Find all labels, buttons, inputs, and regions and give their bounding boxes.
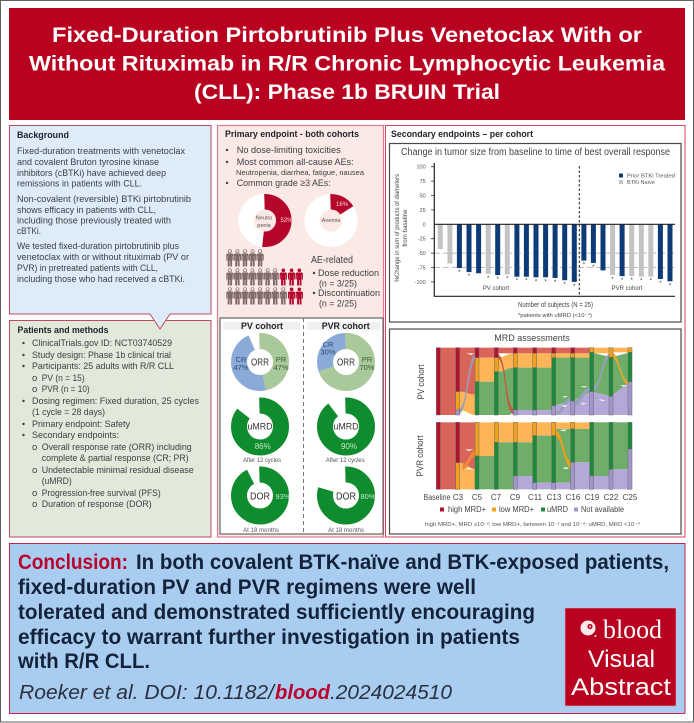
donut: PVR DOR 80%: DOR <box>336 492 356 502</box>
icon array: 25 patients <box>226 250 303 304</box>
title banner <box>9 8 685 120</box>
list: methods: Progression-free survival (PFS) <box>42 488 161 499</box>
text block: AE-related: Dose reduction <box>318 268 379 279</box>
text block: background: inhibitors (cBTKi) have achieved deep <box>17 168 166 179</box>
donut: PV DOR 93%: At 18 months <box>243 527 280 534</box>
text block: conclusion: Conclusion: <box>18 551 128 574</box>
donut: PVR DOR 80%: 80% <box>360 492 376 501</box>
list: methods: PVR (n = 10) <box>42 384 90 395</box>
donut: PVR ORR: PR <box>362 355 373 364</box>
list: methods: (uMRD) <box>42 476 72 487</box>
callout arrow <box>150 313 170 329</box>
donut: neutropenia 52% <box>246 202 293 239</box>
sankey: PVR cohort <box>436 422 632 489</box>
donut: PVR DOR 80%: At 18 months <box>328 527 365 534</box>
waterfall chart: tumor size change: Number of subjects (N = 25) <box>518 302 593 309</box>
text block: background: We tested fixed-duration pirtobrutinib plus <box>17 241 179 252</box>
legend: MRD states: Not available <box>581 505 625 514</box>
legend: bar colours: Prior BTKi Treated <box>627 174 675 180</box>
text block: background <box>17 146 191 285</box>
text block: AE-related: Discontinuation <box>318 288 380 299</box>
text block: conclusion <box>17 551 669 673</box>
heading: secondary endpoints: Secondary endpoints – per cohort <box>391 129 534 140</box>
legend: MRD states: uMRD <box>547 505 568 514</box>
logo: blood Visual Abstract: blood <box>603 615 662 644</box>
donut: PVR uMRD 90%: 90% <box>341 442 357 451</box>
list: methods <box>22 338 199 510</box>
panel: secondary endpoints <box>386 126 685 537</box>
axis labels: cycles: C19 <box>585 493 600 502</box>
legend: bar colours <box>619 174 675 186</box>
bars: BTKi naive <box>438 224 653 277</box>
citation: Roeker et al. DOI: 10.1182/ <box>19 682 277 704</box>
list: methods: Duration of response (DOR) <box>42 499 152 510</box>
list: methods: o <box>32 384 37 395</box>
y-axis tick labels: -100 <box>415 280 426 286</box>
list: methods: Study design: Phase 1b clinical trial <box>32 350 171 361</box>
list: methods: Secondary endpoints: <box>32 430 119 441</box>
y-axis tick labels: 100 <box>417 165 426 171</box>
logo: blood Visual Abstract <box>565 608 676 706</box>
list: primary endpoint <box>226 145 364 189</box>
donut: PVR DOR 80% <box>325 474 376 534</box>
axis labels: cycles: C25 <box>623 493 638 502</box>
y-axis title: %Change in sum of products of diameters <box>394 174 401 282</box>
list: methods: Participants: 25 adults with R/R CLL <box>32 361 174 372</box>
text block: background: shows efficacy in patients with CLL, <box>17 205 156 216</box>
text block: background: Non-covalent (reversible) BTKi pirtobrutinib <box>17 194 191 205</box>
list: methods: Dosing regimen: Fixed duration, 25 cycles <box>32 396 199 407</box>
text block: conclusion: efficacy to warrant further investigation in patients <box>18 626 520 649</box>
donut: PVR ORR: CR <box>323 340 334 349</box>
axis labels: cycles: C5 <box>472 493 483 502</box>
legend: MRD states <box>440 505 625 514</box>
donut: neutropenia 52%: Neutro <box>256 216 272 222</box>
donut: PV ORR: CR <box>236 355 247 364</box>
text block: background: venetoclax with or without rituximab (PV or <box>17 252 189 263</box>
title banner: (CLL): Phase 1b BRUIN Trial <box>194 81 500 104</box>
list: methods: complete & partial response (CR; PR) <box>42 453 189 464</box>
donut: PV DOR 93% <box>239 474 291 534</box>
citation <box>19 682 452 704</box>
list: primary endpoint: Most common all-cause AEs: <box>237 157 354 168</box>
donut: PV ORR <box>233 341 289 383</box>
axis labels: cohorts: PV cohort <box>416 364 426 400</box>
text block: background: cBTKi. <box>17 226 41 237</box>
y-axis tick labels: -25 <box>418 237 426 243</box>
footnote: MRD definitions: high MRD+, MRD ≥10⁻²; low MRD+, between 10⁻² and 10⁻⁴; uMRD, MRD <10⁻⁴ <box>425 521 641 528</box>
axis labels: cycles: C9 <box>510 493 521 502</box>
heading: background: Background <box>17 130 69 141</box>
y-axis tick labels: 25 <box>420 208 426 214</box>
axis labels: cohorts: PVR cohort <box>415 435 425 476</box>
y-axis tick labels: 50 <box>420 194 426 200</box>
heading: patients and methods: Patients and methods <box>18 325 108 336</box>
text block: AE-related <box>311 255 380 310</box>
axis labels: cohorts <box>415 364 426 476</box>
donut: anemia 16%: 16% <box>336 202 349 208</box>
bars: prior BTKi treated <box>457 224 672 282</box>
donut: PVR ORR: 30% <box>320 348 336 356</box>
donut: PV uMRD 86% <box>239 406 282 464</box>
heading: primary endpoint: Primary endpoint - both cohorts <box>225 129 359 140</box>
waterfall chart: tumor size change: PVR cohort <box>612 286 643 292</box>
list: primary endpoint: No dose-limiting toxicities <box>237 145 341 156</box>
waterfall chart: tumor size change: PV cohort <box>483 286 510 292</box>
sankey chart: MRD assessments <box>390 329 681 534</box>
list: methods: o <box>32 499 37 510</box>
panel: patients and methods <box>10 313 211 537</box>
donut: PV ORR: ORR <box>251 358 269 368</box>
list: methods: (1 cycle = 28 days) <box>32 407 105 418</box>
list: methods: Overall response rate (ORR) including <box>42 442 192 453</box>
axis labels: cycles <box>424 493 638 502</box>
title banner: Without Rituximab in R/R Chronic Lymphocytic Leukemia <box>29 52 665 76</box>
donut: PVR uMRD 90% <box>325 406 367 464</box>
donut: PV ORR: PR <box>276 355 287 364</box>
list: primary endpoint: Neutropenia, diarrhea, fatigue, nausea <box>236 170 364 177</box>
donut: anemia 16% <box>312 202 350 239</box>
text block: conclusion: tolerated and demonstrated sufficiently encouraging <box>18 601 535 624</box>
donut: PV DOR 93%: 93% <box>275 492 291 501</box>
axis labels: cycles: C16 <box>566 493 581 502</box>
list: methods: o <box>32 488 37 499</box>
donut: neutropenia 52%: penia <box>257 223 272 229</box>
citation: .2024024510 <box>330 682 452 704</box>
text block: background: and covalent Bruton tyrosine kinase <box>17 157 159 168</box>
text block: background: remissions in patients with CLL. <box>17 178 142 190</box>
donut: PVR ORR <box>320 340 375 383</box>
text block: AE-related: (n = 3/25) <box>319 278 357 290</box>
donut: PVR ORR: ORR <box>337 358 355 368</box>
heading: PV cohort: PV cohort <box>241 321 284 332</box>
list: methods: Undetectable minimal residual disease <box>42 465 194 476</box>
title banner: Fixed-Duration Pirtobrutinib Plus Venetoclax With or <box>52 24 642 47</box>
logo: blood Visual Abstract: Visual <box>588 646 655 673</box>
asterisks: uMRD patients: ********************* <box>458 263 672 290</box>
text block: background: including those previously treated with <box>17 216 171 226</box>
axis labels: cycles: C11 <box>528 493 543 502</box>
y-axis tick labels <box>415 165 426 286</box>
donut: PV ORR: 47% <box>233 363 249 372</box>
donut: neutropenia 52%: 52% <box>280 218 293 224</box>
donut: PV uMRD 86%: uMRD <box>248 422 273 432</box>
donut: anemia 16%: Anemia <box>322 218 341 224</box>
y-axis title <box>394 174 409 282</box>
donut: PV ORR: 47% <box>273 363 289 372</box>
list: methods: o <box>32 373 37 384</box>
text block: conclusion: In both covalent BTK-naïve and BTK-exposed patients, <box>136 551 669 574</box>
text block: AE-related: (n = 2/25) <box>319 298 357 310</box>
text block: background: including those who had received a cBTKi. <box>17 274 185 285</box>
list: methods: o <box>32 465 37 476</box>
y-axis tick labels: 0 <box>423 222 426 228</box>
donut: PV uMRD 86%: After 12 cycles <box>243 457 282 464</box>
text block: background: Fixed-duration treatments with venetoclax <box>17 146 185 157</box>
legend: bar colours: BTKi Naïve <box>627 180 655 186</box>
list: methods: ClinicalTrials.gov ID: NCT03740529 <box>32 338 172 349</box>
waterfall chart: tumor size change: Change in tumor size from baseline to time of best overall response <box>401 147 670 158</box>
citation: blood <box>275 682 331 704</box>
donut: PV uMRD 86%: 86% <box>255 442 271 451</box>
donut: PV DOR 93%: DOR <box>250 492 270 502</box>
list: primary endpoint: Common grade ≥3 AEs: <box>237 178 331 189</box>
text block: conclusion: with R/R CLL. <box>17 650 150 673</box>
text block: AE-related: AE-related <box>311 255 353 266</box>
logo: blood Visual Abstract: Abstract <box>571 674 671 701</box>
legend: MRD states: high MRD+ <box>448 505 486 514</box>
donut: PVR uMRD 90%: After 12 cycles <box>326 457 365 464</box>
waterfall chart: tumor size change: *patients with uMRD (<10⁻⁴) <box>518 312 592 319</box>
panel: background <box>10 126 211 314</box>
y-axis tick labels: -75 <box>418 266 426 272</box>
list: methods: Primary endpoint: Safety <box>32 419 130 430</box>
sankey: PV cohort <box>436 348 632 415</box>
heading: PVR cohort: PVR cohort <box>322 321 370 332</box>
list: methods: o <box>32 442 37 453</box>
axis labels: cycles: C13 <box>547 493 562 502</box>
y-axis tick labels: 75 <box>420 179 426 185</box>
sankey chart: MRD assessments: MRD assessments <box>494 333 570 343</box>
list: methods: PV (n = 15) <box>42 373 85 384</box>
axis labels: cycles: Baseline <box>424 493 451 502</box>
donut: PVR uMRD 90%: uMRD <box>334 422 359 432</box>
panel: primary endpoint and cohorts <box>218 126 384 537</box>
waterfall chart: tumor size change <box>390 144 681 322</box>
text block: background: PVR) in pretreated patients with CLL, <box>17 263 158 274</box>
donut: PVR ORR: 70% <box>359 363 375 372</box>
axis labels: cycles: C3 <box>453 493 464 502</box>
axis labels: cycles: C22 <box>604 493 619 502</box>
y-axis tick labels: -50 <box>418 251 426 257</box>
legend: MRD states: low MRD+ <box>499 505 534 514</box>
text block: conclusion: fixed-duration PV and PVR regimens were well <box>18 576 476 599</box>
axis labels: cycles: C7 <box>491 493 502 502</box>
panel: conclusion <box>10 544 685 714</box>
box: cohort results <box>220 318 383 534</box>
y-axis title: from baseline <box>402 209 409 247</box>
